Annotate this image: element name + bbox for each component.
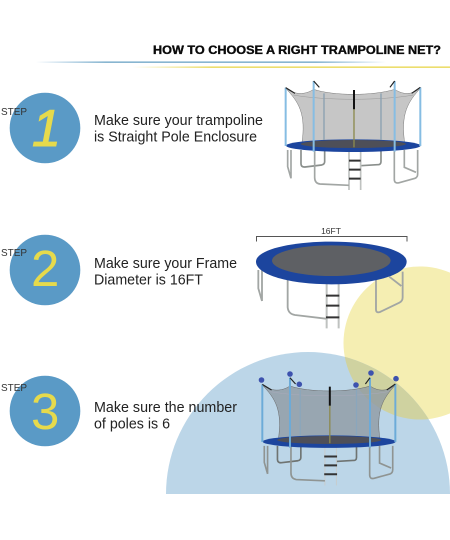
step 1 text: Make sure your trampoline [94,113,263,129]
title: HOW TO CHOOSE A RIGHT TRAMPOLINE NET? [153,45,441,57]
step 2 badge: STEP [1,247,27,259]
ladder [325,446,336,485]
step 3 badge: STEP [1,382,27,394]
trampoline frame [256,242,407,328]
diameter label [256,226,407,242]
mat [272,245,391,276]
diameter label: 16FT [321,226,341,236]
back legs [301,150,381,167]
poles [300,390,356,436]
step 3 text: of poles is 6 [94,416,170,432]
back legs [277,446,356,463]
step 1 badge: STEP [1,106,27,118]
front legs [288,150,418,185]
blue background semicircle [166,352,450,494]
title underlines [36,62,450,68]
rim [256,242,407,284]
trampoline with straight pole enclosure [286,81,421,190]
step 2 text: Make sure your Frame [94,256,237,272]
step 3 badge: 3 [31,383,59,440]
net [262,385,395,441]
ladder [349,150,361,190]
step 3 badge [1,376,80,446]
rim [286,139,421,152]
net [286,88,420,145]
step 3 text: Make sure the number [94,400,237,416]
zip [351,90,357,109]
ladder [327,282,339,328]
trampoline with six poles [259,370,399,485]
zip [327,387,333,406]
rim [263,435,396,448]
step 1 text: is Straight Pole Enclosure [94,130,257,146]
step 1 badge: 1 [32,100,61,158]
step 2 text: Diameter is 16FT [94,272,203,288]
yellow background circle [343,266,450,420]
step 2 badge [1,235,80,305]
poles [324,93,381,140]
step 1 badge [1,93,80,163]
front legs [264,446,393,481]
step 2 badge: 2 [31,240,59,297]
pole caps [259,370,399,388]
legs [258,270,403,319]
